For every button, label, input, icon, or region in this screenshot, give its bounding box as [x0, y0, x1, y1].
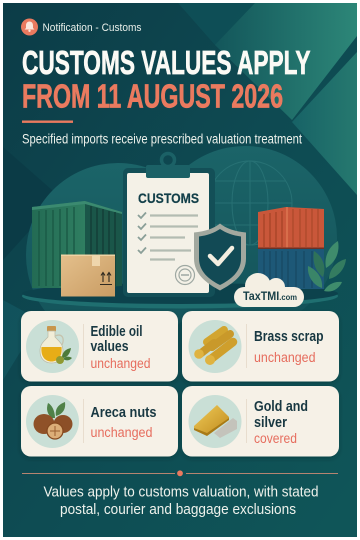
- clipboard clip: [146, 154, 190, 178]
- text: gold and silver: [254, 399, 308, 446]
- panel: areca nuts: [21, 386, 178, 456]
- cloud logo: TaxTMI.com: [243, 289, 297, 303]
- text: areca nuts: Areca nuts: [90, 405, 156, 421]
- icon: bell: [21, 18, 38, 36]
- accent rule: [22, 120, 73, 123]
- text: areca nuts: [90, 405, 156, 440]
- icon: globe: [208, 161, 292, 245]
- text: areca nuts: unchanged: [90, 425, 152, 440]
- red container: [258, 207, 324, 249]
- cloud logo: [234, 273, 304, 307]
- text: gold and silver: silver: [254, 415, 287, 431]
- text: gold and silver: Gold and: [254, 399, 308, 415]
- divider: [245, 324, 248, 368]
- footer note: Values apply to customs valuation, with stated: [44, 484, 318, 500]
- stamp seal: [176, 266, 194, 284]
- platform: [22, 283, 338, 308]
- icon: gold and silver bars: [194, 405, 237, 438]
- text: edible oil: Edible oil: [90, 324, 142, 340]
- text: brass scrap: [254, 329, 324, 365]
- plant leaves: [308, 241, 346, 292]
- cardboard box: [61, 254, 115, 296]
- text: edible oil: values: [90, 339, 128, 355]
- subtitle: Specified imports receive prescribed valuation treatment: [22, 132, 302, 146]
- footer note: [44, 484, 318, 518]
- text: edible oil: unchanged: [90, 356, 150, 371]
- clipboard: [123, 154, 215, 297]
- icon: brass rods: [194, 330, 233, 365]
- footer note: postal, courier and baggage exclusions: [60, 502, 296, 518]
- illustration: customs scene: [22, 146, 346, 347]
- blue container: [258, 249, 324, 289]
- panel: edible oil: [21, 311, 178, 382]
- panel: gold and silver: [182, 386, 339, 456]
- panel: brass scrap: [182, 311, 339, 382]
- text: gold and silver: covered: [254, 431, 297, 446]
- text: brass scrap: unchanged: [254, 350, 316, 365]
- title: [22, 44, 310, 114]
- icon: areca nuts: [34, 402, 72, 439]
- text: brass scrap: Brass scrap: [254, 329, 324, 345]
- notification badge: [21, 18, 142, 36]
- icon: oil bottle: [40, 326, 72, 364]
- checklist: [138, 212, 198, 260]
- clipboard heading: CUSTOMS: [138, 190, 199, 206]
- divider: [82, 324, 85, 368]
- footer divider: [22, 470, 338, 476]
- divider: [82, 399, 85, 443]
- green container: [32, 201, 122, 288]
- icon: shield with check: [194, 224, 246, 290]
- divider: [245, 399, 248, 443]
- backdrop domes: [26, 146, 337, 347]
- badge label: Notification - Customs: [42, 22, 142, 34]
- text: edible oil: [90, 324, 150, 371]
